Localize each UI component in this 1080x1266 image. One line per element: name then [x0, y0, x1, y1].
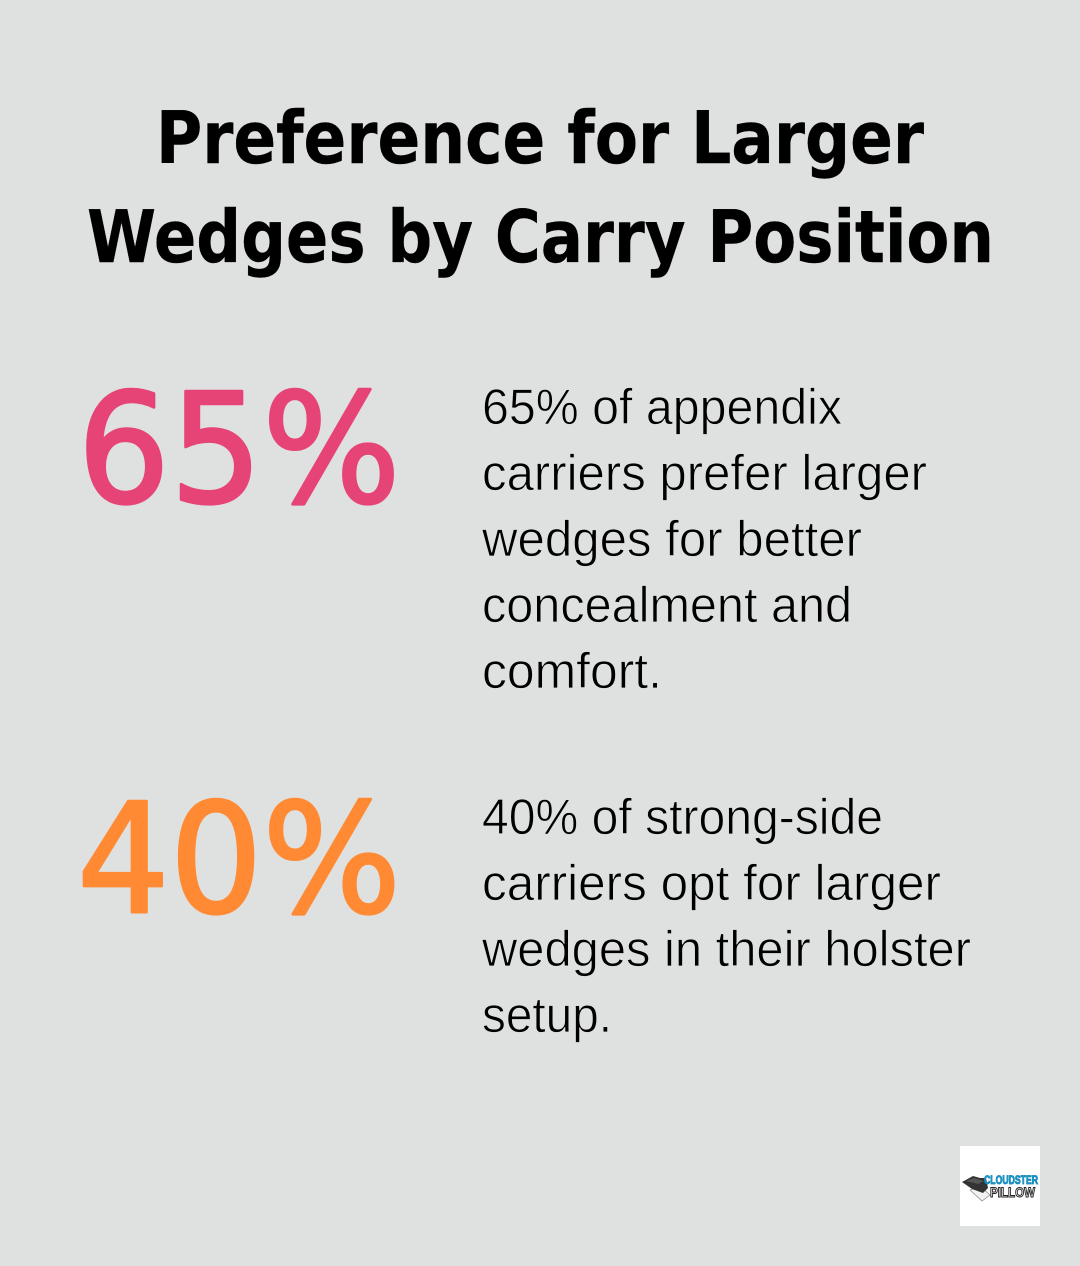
statistic: 40%: 40% — [77, 771, 401, 948]
text block: strong-side carriers: carriers opt for larger — [482, 855, 941, 911]
text block: appendix carriers: wedges for better — [481, 511, 862, 567]
text block: appendix carriers — [481, 379, 927, 699]
text block: appendix carriers: carriers prefer larger — [482, 445, 927, 501]
statistic: 65%: 65% — [78, 361, 400, 538]
text block: strong-side carriers: 40% of strong-side — [482, 789, 883, 845]
title — [87, 96, 994, 279]
text block: appendix carriers: 65% of appendix — [482, 379, 842, 435]
text block: strong-side carriers — [481, 789, 971, 1043]
text block: appendix carriers: concealment and — [482, 577, 852, 633]
logo: Cloudster Pillow — [960, 1146, 1040, 1226]
title: Preference for Larger — [156, 96, 924, 180]
text block: strong-side carriers: setup. — [482, 987, 612, 1043]
logo wordmark: CLOUDSTER — [984, 1173, 1038, 1187]
icon: wedge pillow — [962, 1176, 990, 1201]
text block: strong-side carriers: wedges in their holster — [481, 921, 971, 977]
logo wordmark: PILLOW — [990, 1184, 1036, 1200]
logo wordmark — [984, 1173, 1038, 1200]
text block: appendix carriers: comfort. — [482, 643, 662, 699]
